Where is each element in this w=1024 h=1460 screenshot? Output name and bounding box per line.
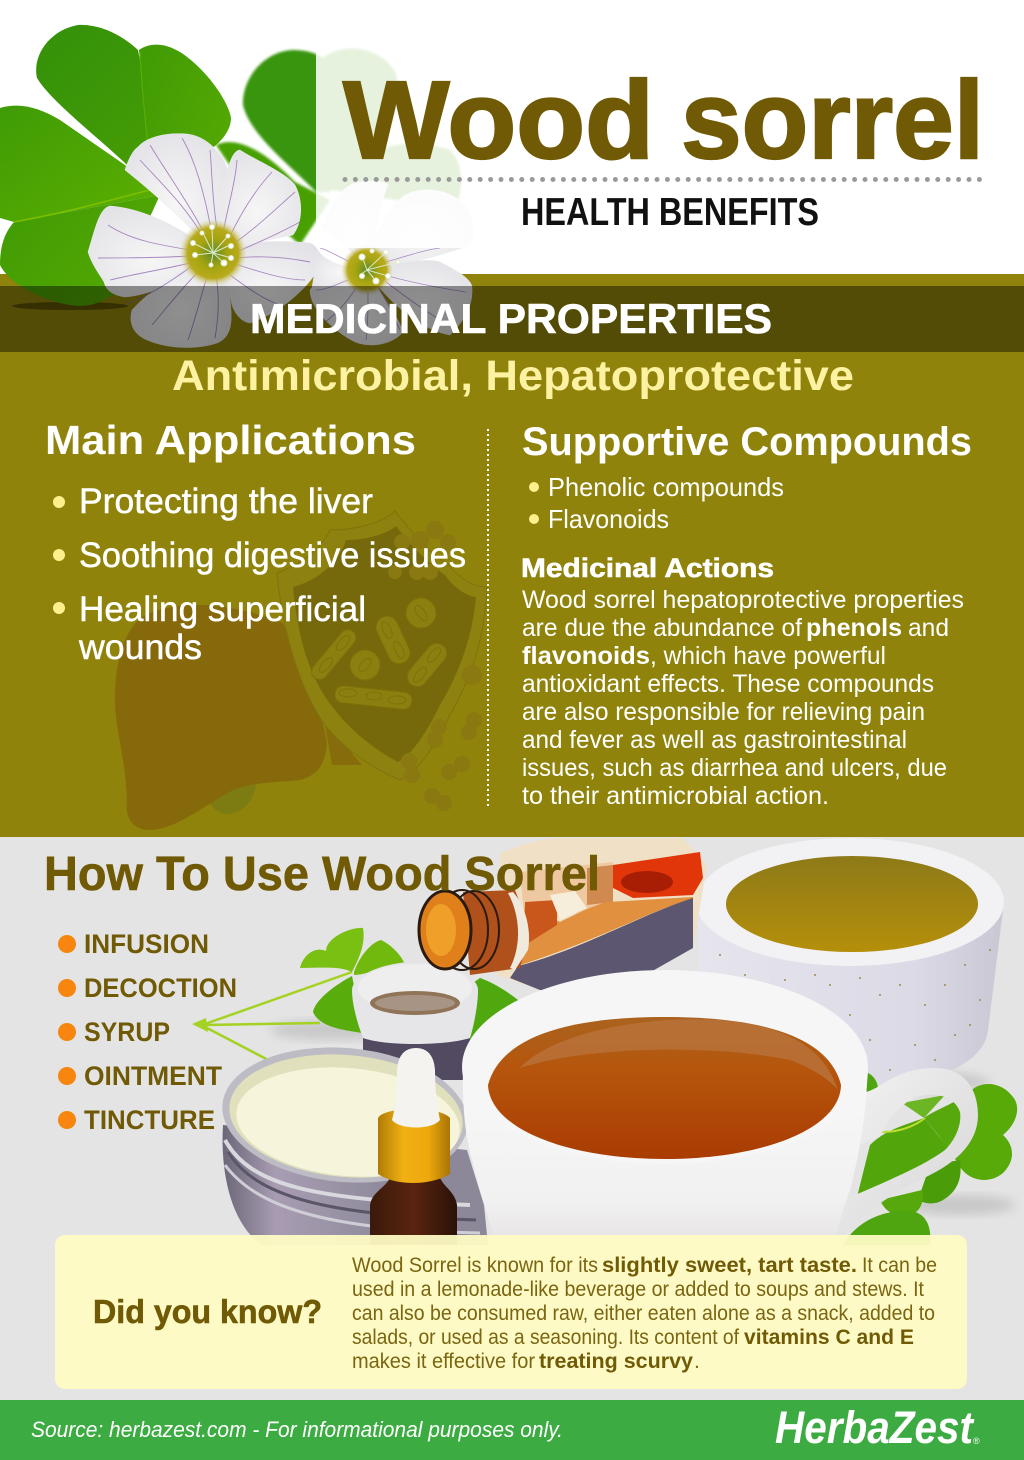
illustration: small white flower <box>310 181 473 345</box>
white wash behind the title <box>316 0 1024 248</box>
did you know paragraph: makes it effective for <box>352 1350 535 1373</box>
illustration: back ceramic cup of tea <box>696 838 1004 1094</box>
heading: how to use: How To Use Wood Sorrel <box>44 848 600 901</box>
application list: Healing superficial <box>79 590 366 629</box>
illustration: clover sprig left <box>192 928 545 1063</box>
illustration: dropper bottle <box>370 1048 457 1245</box>
dotted divider <box>345 177 988 182</box>
preparation labels <box>84 929 237 1135</box>
application list: Soothing digestive issues <box>79 536 466 575</box>
did you know paragraph: salads, or used as a seasoning. Its content of <box>352 1326 739 1349</box>
panel: did you know <box>55 1235 967 1389</box>
compound list: Flavonoids <box>548 504 669 534</box>
medicinal actions paragraph: issues, such as diarrhea and ulcers, due <box>522 754 947 782</box>
compound list: Phenolic compounds <box>548 472 784 502</box>
medicinal actions paragraph: antioxidant effects. These compounds <box>522 670 934 698</box>
medicinal actions paragraph: and fever as well as gastrointestinal <box>522 726 907 754</box>
panel: medicinal properties background <box>0 274 1024 837</box>
medicinal actions paragraph: and <box>908 614 949 642</box>
subtitle: HEALTH BENEFITS <box>521 191 819 234</box>
heading: medicinal actions: Medicinal Actions <box>521 553 774 583</box>
medicinal actions paragraph: are due the abundance of <box>522 614 802 642</box>
heading: did you know: Did you know? <box>93 1293 322 1330</box>
did you know paragraph: used in a lemonade-like beverage or added to soups and stews. It <box>352 1278 924 1301</box>
panel: main applications <box>45 417 466 667</box>
heading: medicinal properties: MEDICINAL PROPERTIES <box>250 295 772 342</box>
footer <box>0 1400 1024 1460</box>
medicinal actions paragraph: are also responsible for relieving pain <box>522 698 925 726</box>
column divider <box>487 429 489 806</box>
did you know paragraph: slightly sweet, tart taste. <box>602 1254 857 1277</box>
did you know paragraph: . <box>694 1350 700 1373</box>
illustration: clover leaves right <box>843 1073 1017 1245</box>
did you know paragraph: treating scurvy <box>539 1350 693 1373</box>
heading: supportive compounds: Supportive Compounds <box>522 420 972 464</box>
did you know paragraph: Wood Sorrel is known for its <box>352 1254 598 1277</box>
did you know paragraph: vitamins C and E <box>744 1326 914 1349</box>
application list <box>78 482 466 667</box>
preparation labels: OINTMENT <box>84 1061 222 1091</box>
did you know paragraph: can also be consumed raw, either eaten alone as a snack, added to <box>352 1302 935 1325</box>
registered mark: ® <box>973 1436 980 1446</box>
title: sorrel <box>681 59 984 182</box>
heading band <box>0 286 1024 352</box>
heading: main applications: Main Applications <box>45 417 416 463</box>
application bullets <box>53 496 65 614</box>
did you know paragraph <box>352 1254 937 1373</box>
preparation labels: INFUSION <box>84 929 209 959</box>
did you know paragraph: It can be <box>862 1254 937 1277</box>
title: Wood <box>343 59 654 182</box>
preparation labels: DECOCTION <box>84 973 237 1003</box>
panel: supportive compounds <box>521 420 972 810</box>
illustration: liver and shield watermark <box>115 511 487 830</box>
compound list <box>548 472 784 534</box>
panel: how to use background <box>0 837 1024 1400</box>
compound bullets <box>529 482 539 524</box>
application list: wounds <box>78 628 202 667</box>
medicinal actions paragraph <box>522 586 964 810</box>
preparation labels: SYRUP <box>84 1017 170 1047</box>
illustration: front white cup of tea <box>462 970 978 1290</box>
illustration: large white flower <box>88 134 319 348</box>
medicinal properties list: Antimicrobial, Hepatoprotective <box>172 352 854 400</box>
illustration: wood sorrel leaves <box>0 25 461 310</box>
cup speckles <box>709 949 991 1071</box>
illustration: tin of ointment <box>217 1038 488 1245</box>
application list: Protecting the liver <box>79 482 373 521</box>
medicinal actions paragraph: to their antimicrobial action. <box>522 782 829 810</box>
logo: HerbaZest: HerbaZest <box>775 1402 975 1453</box>
illustration: tilted syrup bottle <box>419 838 707 991</box>
orange bullets <box>58 935 76 1129</box>
medicinal actions paragraph: , which have powerful <box>650 642 886 670</box>
list: preparation forms <box>58 929 237 1135</box>
source note: Source: herbazest.com - For informational purposes only. <box>31 1417 563 1442</box>
illustration: small measuring cup <box>352 962 478 1080</box>
medicinal actions paragraph: flavonoids <box>522 642 650 670</box>
medicinal actions paragraph: Wood sorrel hepatoprotective properties <box>522 586 964 614</box>
medicinal actions paragraph: phenols <box>806 614 902 642</box>
title <box>343 59 984 182</box>
preparation labels: TINCTURE <box>84 1105 215 1135</box>
